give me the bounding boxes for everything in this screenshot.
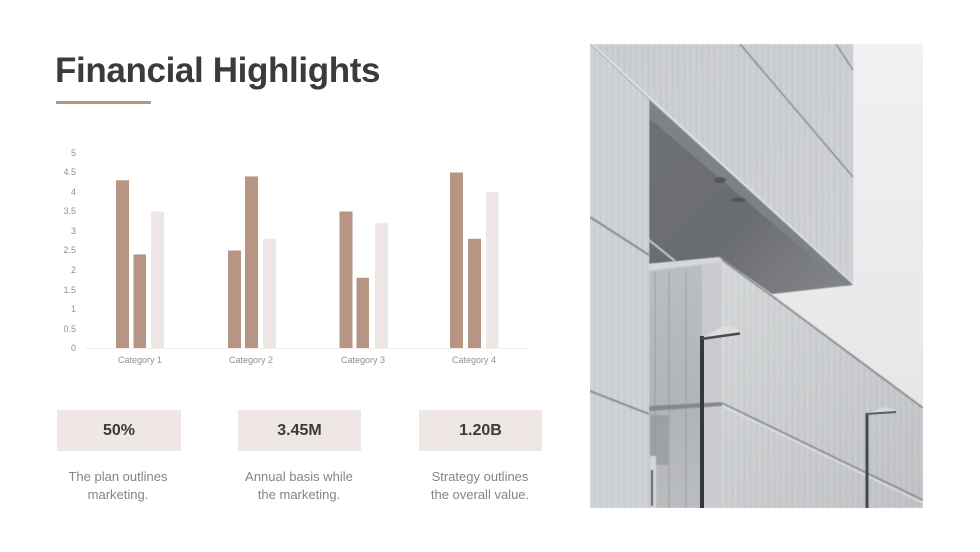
stat box: 3.45M: 3.45M bbox=[277, 422, 322, 439]
category labels: Category 4 bbox=[452, 355, 496, 365]
bars: category 3 bbox=[340, 212, 388, 348]
stat caption 3 bbox=[431, 469, 529, 502]
category labels: Category 1 bbox=[118, 355, 162, 365]
stat caption 1: marketing. bbox=[88, 486, 148, 502]
title: Financial Highlights bbox=[55, 51, 380, 90]
stat box: 3.45M bbox=[238, 410, 361, 451]
category labels bbox=[118, 355, 496, 365]
street lamp far bbox=[866, 407, 896, 508]
stat caption 3: Strategy outlines bbox=[432, 469, 528, 484]
stat box: 50%: 50% bbox=[103, 422, 135, 439]
y axis labels: 3.5 bbox=[63, 206, 76, 216]
stat caption 2: the marketing. bbox=[258, 486, 340, 502]
title underline bbox=[56, 101, 151, 104]
bars: category 4 bbox=[450, 172, 498, 348]
stat caption 1: The plan outlines bbox=[68, 469, 168, 484]
bars: category 1 bbox=[116, 180, 164, 348]
category labels: Category 2 bbox=[229, 355, 273, 365]
y axis labels: 0 bbox=[71, 343, 76, 353]
street lamp near bbox=[700, 326, 740, 508]
stat caption 3: the overall value. bbox=[431, 486, 529, 502]
upper building face bbox=[590, 44, 853, 285]
y axis labels: 1 bbox=[71, 304, 76, 314]
stat box: 1.20B: 1.20B bbox=[459, 422, 502, 439]
stat caption 2 bbox=[245, 469, 353, 502]
y axis labels: 0.5 bbox=[63, 324, 76, 334]
y axis labels: 4.5 bbox=[63, 167, 76, 177]
y axis labels: 1.5 bbox=[63, 285, 76, 295]
bar chart bbox=[63, 148, 530, 365]
y axis labels: 2.5 bbox=[63, 245, 76, 255]
bars: category 2 bbox=[228, 176, 276, 348]
category labels: Category 3 bbox=[341, 355, 385, 365]
y axis labels: 3 bbox=[71, 226, 76, 236]
lower building face bbox=[718, 257, 923, 508]
y axis labels: 2 bbox=[71, 265, 76, 275]
stat box: 50% bbox=[57, 410, 181, 451]
sky bbox=[590, 44, 923, 508]
y axis labels bbox=[63, 148, 76, 353]
concrete soffit bbox=[649, 100, 853, 294]
y axis labels: 4 bbox=[71, 187, 76, 197]
stat caption 1 bbox=[68, 469, 168, 502]
stat box: 1.20B bbox=[419, 410, 542, 451]
photo: concrete building with street lamps bbox=[590, 44, 923, 508]
left wall bbox=[590, 44, 675, 508]
recessed central block bbox=[649, 257, 722, 508]
y axis labels: 5 bbox=[71, 148, 76, 158]
stat caption 2: Annual basis while bbox=[245, 469, 353, 484]
